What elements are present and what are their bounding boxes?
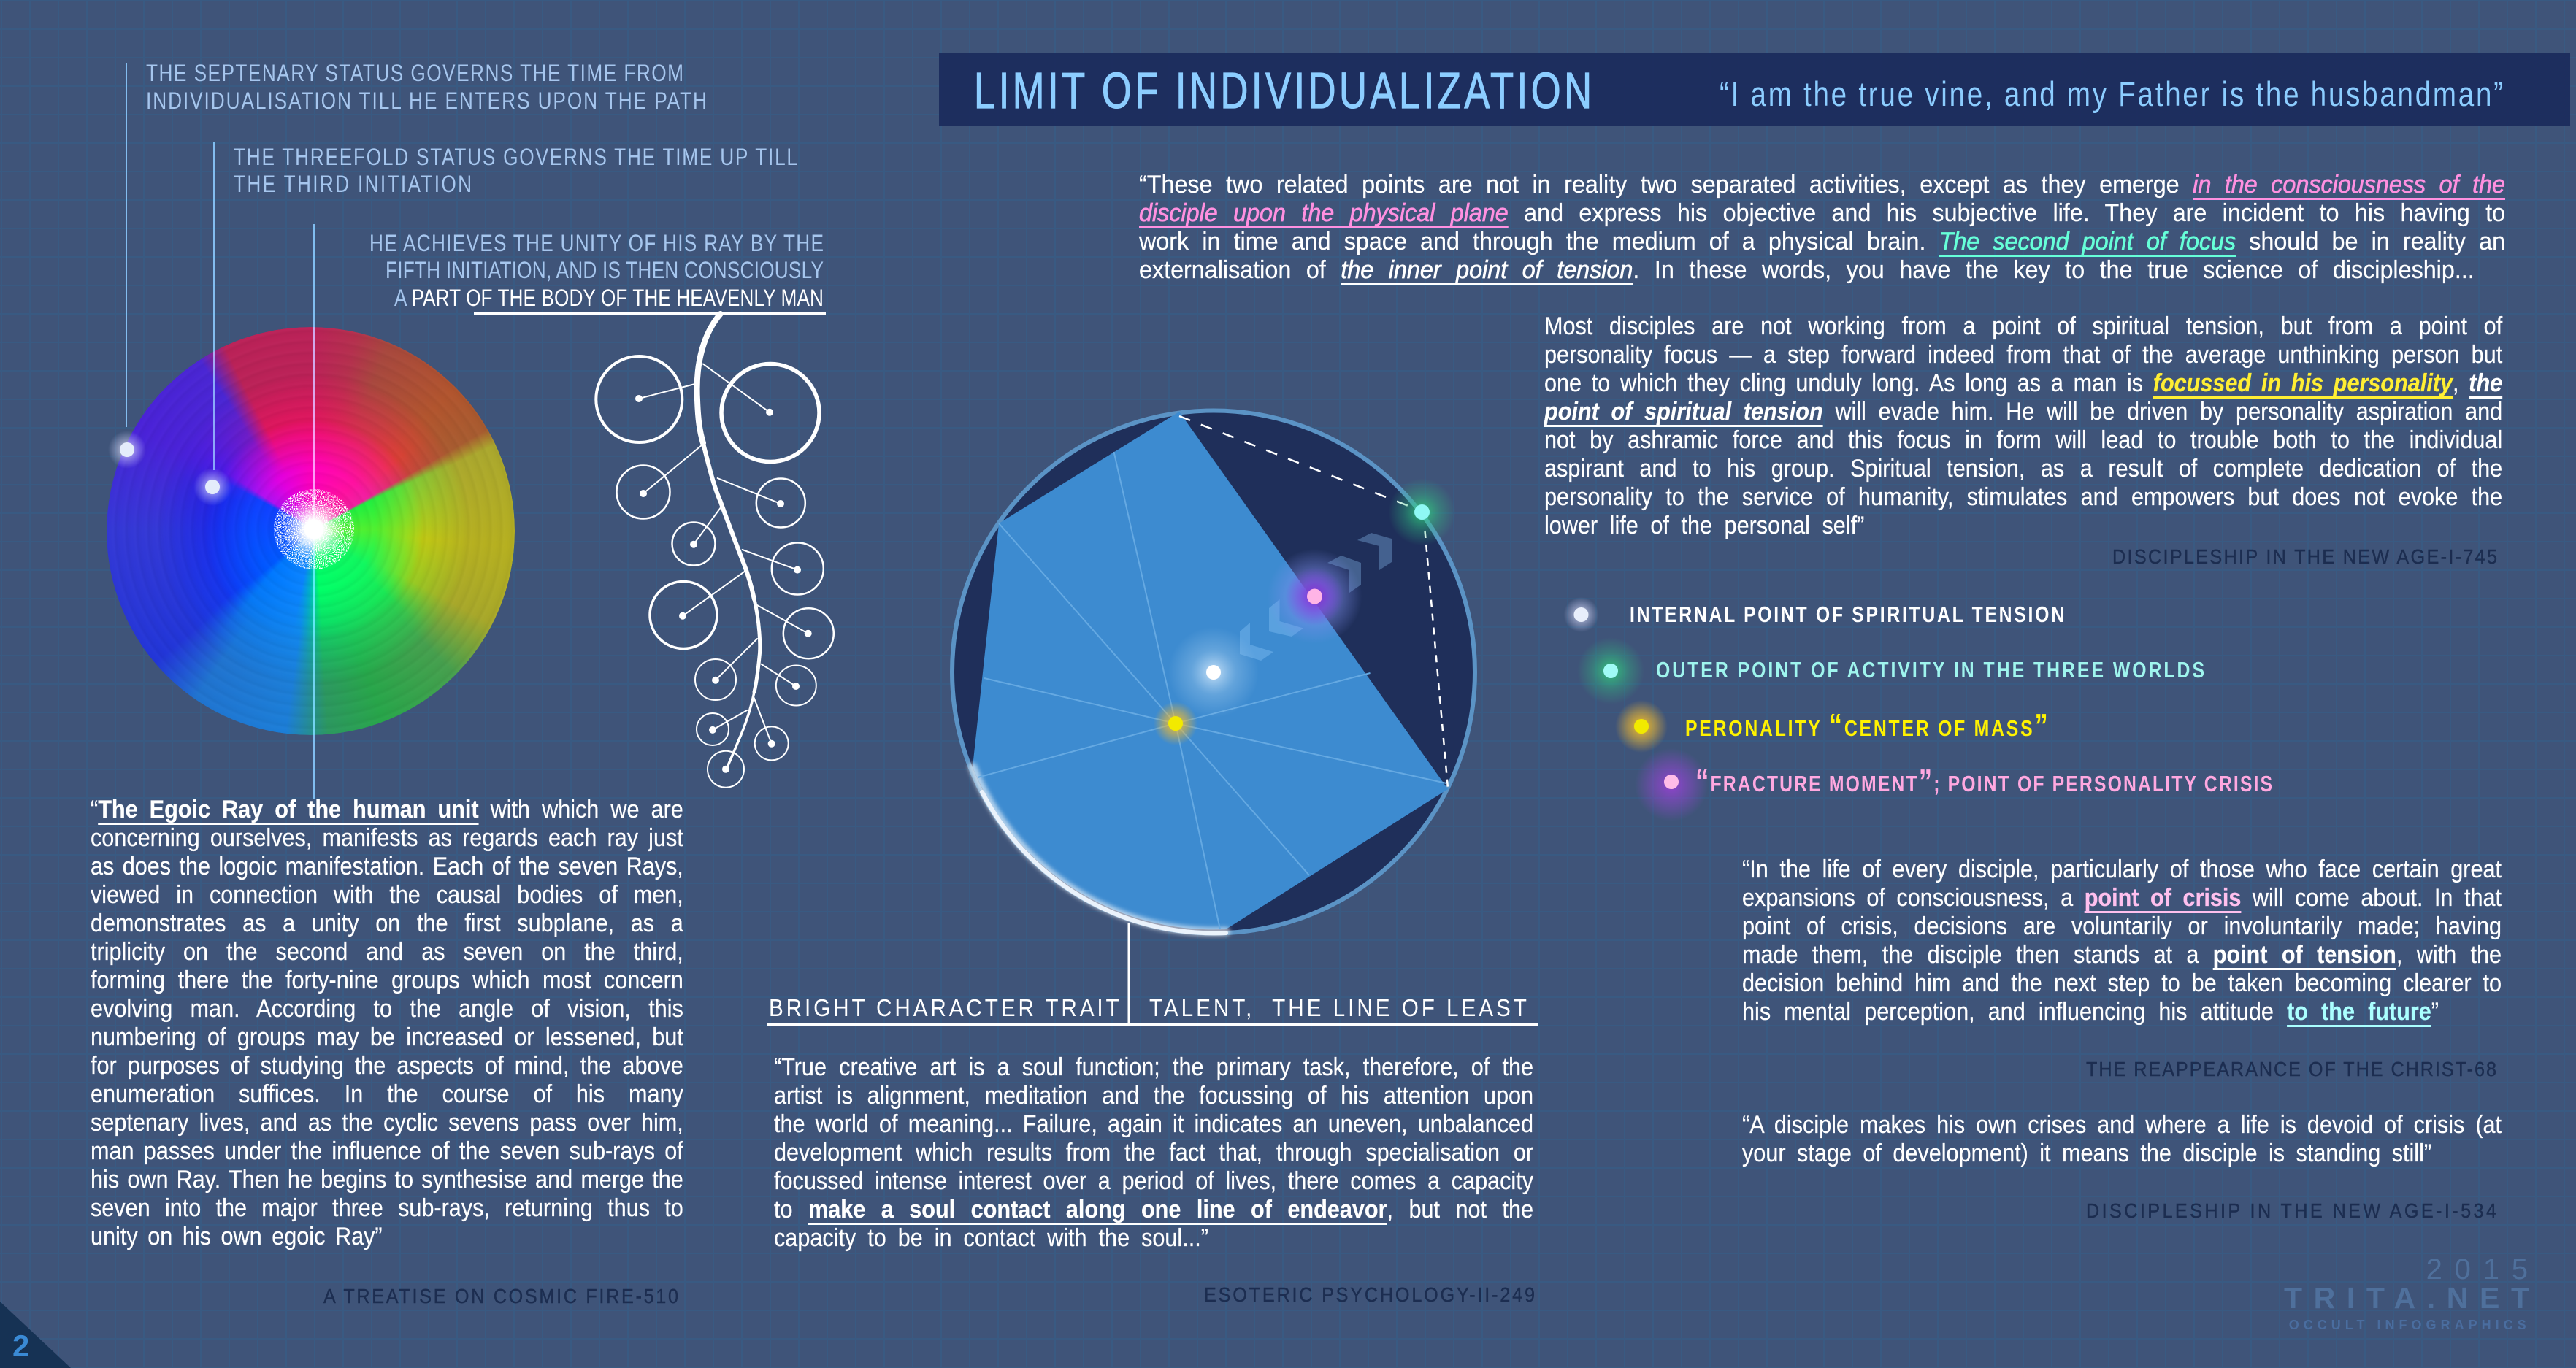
text block: disciples focus quote: one to which they cling unduly long. As long as a man is focussed in his personality, the (1544, 369, 2502, 397)
chevrons toward inner point (1240, 599, 1303, 661)
legend: internal point of spiritual tension (1564, 597, 2064, 632)
circle disc (952, 410, 1475, 933)
text block: disciples focus quote (1544, 312, 2503, 539)
text block: egoic ray quote: enumeration suffices. In the course of his many (91, 1080, 683, 1108)
text block: creative art quote (774, 1053, 1533, 1252)
text block: point of crisis quote: expansions of consciousness, a point of crisis will come about. In that (1742, 884, 2502, 912)
text block: egoic ray quote: demonstrates as a unity on the first subplane, as a (91, 910, 683, 937)
text block: top quote (1139, 171, 2506, 285)
text block: egoic ray quote: “The Egoic Ray of the human unit with which we are (91, 796, 683, 823)
citation: discipleship 534: DISCIPLESHIP IN THE NEW AGE-I-534 (2086, 1199, 2496, 1222)
text: unity of ray: HE ACHIEVES THE UNITY OF HIS RAY BY THE (369, 231, 824, 257)
legend: personality center of mass: PERONALITY (1685, 715, 1820, 741)
legend: personality center of mass: CENTER OF MASS (1844, 715, 2033, 741)
text block: creative art quote: focussed intense interest over a period of lives, there comes a capacity (774, 1167, 1533, 1195)
text block: disciples focus quote: personality focus — a step forward indeed from that of the average unthinking person but (1544, 341, 2502, 369)
icon: vine with branches and circles (596, 314, 834, 788)
citation: discipleship 745: DISCIPLESHIP IN THE NEW AGE-I-745 (2112, 545, 2497, 568)
white arc highlight (973, 767, 1226, 933)
watermark: 2015 (2426, 1253, 2528, 1286)
text block: top quote: disciple upon the physical plane and express his objective and his subjective life. They are incident to his having to (1139, 199, 2505, 227)
text block: egoic ray quote: septenary lives, and as the cyclic sevens pass over him, (91, 1109, 683, 1137)
text block: point of crisis quote: his mental perception, and influencing his attitude to the future” (1742, 998, 2439, 1026)
polygon spokes (978, 452, 1446, 929)
text block: point of crisis quote: point of crisis, decisions are voluntarily or involuntarily made; having (1742, 912, 2502, 940)
text: unity of ray: A PART OF THE BODY OF THE HEAVENLY MAN (394, 286, 824, 312)
text block: top quote: externalisation of the inner point of tension. In these words, you have the key to the true science of discipleship... (1139, 256, 2475, 284)
text block: egoic ray quote: numbering of groups may be increased or lessened, but (91, 1023, 683, 1051)
citation: reappearance: THE REAPPEARANCE OF THE CHRIST-68 (2086, 1058, 2496, 1080)
watermark: TRITA.NET (2284, 1281, 2529, 1315)
caption rule (767, 1023, 1538, 1026)
legend: fracture moment: FRACTURE MOMENT (1711, 771, 1917, 796)
text block: egoic ray quote (91, 796, 683, 1250)
legend: personality center of mass (1615, 700, 2048, 753)
text block: top quote: “These two related points are not in reality two separated activities, except as they emerge in the consciousness of the (1139, 171, 2505, 199)
text block: disciples focus quote: lower life of the personal self” (1544, 512, 1864, 539)
text block: egoic ray quote: unity on his own egoic Ray” (91, 1223, 383, 1250)
chevrons toward outer point (1327, 533, 1392, 593)
legend: fracture moment (1635, 748, 2272, 821)
text block: creative art quote: the world of meaning... Failure, again it indicates an uneven, unbalanced (774, 1110, 1533, 1138)
text block: disciple makes crises quote (1742, 1111, 2502, 1167)
legend: fracture moment: “ (1695, 762, 1709, 800)
text block: egoic ray quote: his own Ray. Then he begins to synthesise and merge the (91, 1166, 683, 1194)
leader line: unity of ray (313, 224, 315, 799)
caption: bright character trait (769, 995, 1527, 1021)
caption: bright character trait: TALENT, THE LINE OF LEAST (1149, 995, 1527, 1021)
panel: seven-ray colour wheel (107, 327, 515, 735)
citation: cosmic fire: A TREATISE ON COSMIC FIRE-510 (323, 1285, 678, 1307)
legend: internal point of spiritual tension: INTERNAL POINT OF SPIRITUAL TENSION (1630, 602, 2064, 627)
text block: creative art quote: artist is alignment, meditation and the focussing of his attention upon (774, 1082, 1533, 1110)
text block: egoic ray quote: man passes under the influence of the seven sub-rays of (91, 1137, 683, 1165)
text block: egoic ray quote: viewed in connection with the causal bodies of men, (91, 881, 683, 909)
legend: fracture moment: ; POINT OF PERSONALITY CRISIS (1933, 771, 2272, 796)
text block: egoic ray quote: evolving man. According to the angle of vision, this (91, 995, 683, 1023)
text block: disciples focus quote: personality to the service of humanity, stimulates and empowers but does not evoke the (1544, 483, 2502, 511)
text: threefold status: THE THIRD INITIATION (234, 172, 472, 198)
text: threefold status: THE THREEFOLD STATUS GOVERNS THE TIME UP TILL (234, 145, 797, 171)
text block: creative art quote: “True creative art is a soul function; the primary task, therefore, of the (774, 1053, 1533, 1081)
text block: egoic ray quote: concerning ourselves, manifests as regards each ray just (91, 824, 683, 852)
text block: creative art quote: development which results from the fact that, through specialisation or (774, 1139, 1533, 1167)
text block: creative art quote: capacity to be in contact with the soul...” (774, 1224, 1208, 1252)
citation: esoteric psychology: ESOTERIC PSYCHOLOGY-II-249 (1204, 1283, 1535, 1306)
text block: point of crisis quote: decision behind him and the next step to be taken becoming clearer to (1742, 969, 2502, 997)
caption: bright character trait: BRIGHT CHARACTER TRAIT (769, 995, 1119, 1021)
legend: personality center of mass: “ (1829, 707, 1842, 745)
dashed paths (1179, 416, 1448, 788)
text: septenary status (146, 61, 707, 115)
icon: white burst at wheel centre (274, 489, 354, 569)
text block: disciple makes crises quote: “A disciple makes his own crises and where a life is devoid of crisis (at (1742, 1111, 2502, 1139)
watermark (2284, 1253, 2529, 1332)
subtitle quote: “I am the true vine, and my Father is the husbandman” (1720, 75, 2503, 114)
point: personality centre of mass (1154, 702, 1197, 745)
text block: disciples focus quote: Most disciples are not working from a point of spiritual tension, but from a point of (1544, 312, 2502, 340)
text block: egoic ray quote: forming there the forty-nine groups which most concern (91, 967, 683, 994)
text block: disciples focus quote: aspirant and to his group. Spiritual tension, as a result of complete dedication of the (1544, 455, 2502, 483)
text block: egoic ray quote: triplicity on the second and as seven on the third, (91, 938, 683, 966)
text block: disciples focus quote: point of spiritual tension will evade him. He will be driven by personality aspiration and (1544, 398, 2502, 426)
leader line: threefold status (213, 142, 215, 470)
title: LIMIT OF INDIVIDUALIZATION (974, 63, 1592, 120)
central diagram: circle with polygon (952, 410, 1475, 1026)
text block: point of crisis quote: made them, the disciple then stands at a point of tension, with the (1742, 941, 2502, 969)
legend: outer point of activity: OUTER POINT OF ACTIVITY IN THE THREE WORLDS (1656, 657, 2204, 683)
text block: disciple makes crises quote: your stage of development) it means the disciple is standing still” (1742, 1140, 2431, 1167)
text block: top quote: work in time and space and through the medium of a physical brain. The second point of focus should be in reality an (1139, 228, 2505, 255)
text block: creative art quote: to make a soul contact along one line of endeavor, but not the (774, 1196, 1533, 1223)
title banner (939, 53, 2570, 126)
text: septenary status: INDIVIDUALISATION TILL HE ENTERS UPON THE PATH (146, 89, 707, 115)
point: outer activity (1389, 479, 1456, 546)
text block: point of crisis quote (1742, 856, 2502, 1027)
page number corner: 2 (12, 1329, 29, 1363)
legend: fracture moment: ” (1919, 762, 1932, 800)
text block: egoic ray quote: as does the logoic manifestation. Each of the seven Rays, (91, 853, 683, 880)
legend: personality center of mass: ” (2034, 707, 2048, 745)
text block: egoic ray quote: seven into the major three sub-rays, returning thus to (91, 1194, 683, 1222)
heavenly man rule (474, 312, 826, 315)
icon: septenary dot (108, 431, 146, 469)
watermark: OCCULT INFOGRAPHICS (2289, 1318, 2526, 1332)
blue polygon (973, 412, 1448, 929)
leader line: septenary status (126, 63, 127, 427)
text: unity of ray: FIFTH INITIATION, AND IS THEN CONSCIOUSLY (386, 258, 824, 284)
point: internal spiritual tension (1168, 627, 1259, 718)
text block: disciples focus quote: not by ashramic force and this focus in form will lead to trouble both to the individual (1544, 426, 2502, 454)
text: septenary status: THE SEPTENARY STATUS GOVERNS THE TIME FROM (146, 61, 683, 87)
stem line (1127, 923, 1130, 1026)
page number corner (0, 1302, 71, 1368)
text: unity of ray (369, 231, 824, 312)
icon: threefold dot (193, 468, 231, 506)
point: fracture moment (1268, 549, 1362, 644)
legend: outer point of activity (1577, 637, 2204, 704)
text block: point of crisis quote: “In the life of every disciple, particularly of those who face certain great (1742, 856, 2502, 883)
text block: egoic ray quote: for purposes of studying the aspects of mind, the above (91, 1052, 683, 1080)
text: threefold status (234, 145, 797, 198)
